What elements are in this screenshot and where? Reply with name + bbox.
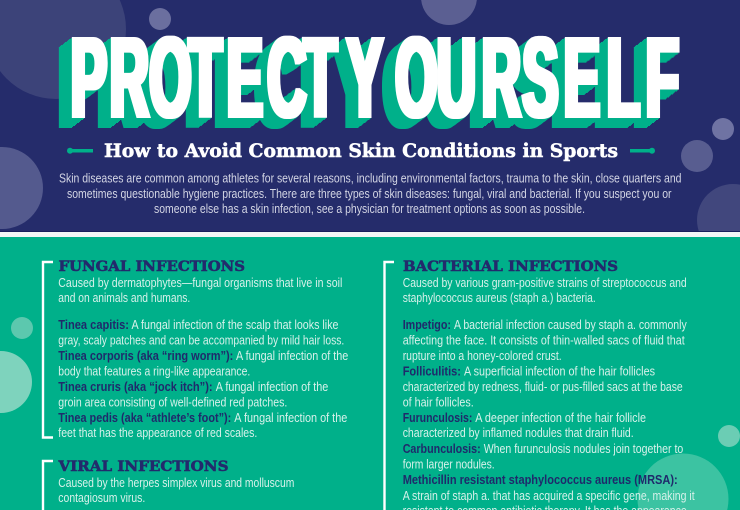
decorative circle: right small xyxy=(718,425,740,447)
entry: tinea corporis: Tinea corporis (aka “ring worm”): xyxy=(58,349,233,363)
entry: impetigo: rupture into a honey-colored crust. xyxy=(403,349,562,363)
entry: tinea corporis xyxy=(58,349,348,378)
entry: MRSA: Methicillin resistant staphylococcus aureus (MRSA): xyxy=(403,473,678,487)
entry: tinea capitis: Tinea capitis: xyxy=(58,318,129,332)
intro text xyxy=(403,276,687,305)
panel: bacterial infections xyxy=(384,259,695,510)
entry: furunculosis: A deeper infection of the hair follicle xyxy=(475,411,646,425)
decorative circle: right medium xyxy=(681,140,713,172)
heading: VIRAL INFECTIONS xyxy=(57,459,228,475)
entry: MRSA: A strain of staph a. that has acquired a specific gene, making it xyxy=(403,489,695,503)
entry: impetigo: A bacterial infection caused by staph a. commonly xyxy=(454,318,687,332)
decorative circle: bottom right xyxy=(697,184,740,256)
entry: tinea cruris: groin area consisting of well-defined red patches. xyxy=(58,396,287,410)
panel: green content background xyxy=(0,231,740,510)
entry: tinea pedis: Tinea pedis (aka “athlete’s foot”): xyxy=(58,411,231,425)
entry: furunculosis: characterized by inflamed nodules that drain fluid. xyxy=(403,426,634,440)
entry: folliculitis xyxy=(403,364,683,410)
intro text xyxy=(58,476,294,505)
entry: furunculosis xyxy=(403,411,646,440)
subtitle: How to Avoid Common Skin Conditions in Sports xyxy=(104,140,618,162)
entry: tinea pedis: feet that has the appearance of red scales. xyxy=(58,426,257,440)
entry: impetigo xyxy=(403,318,687,363)
decorative circle: right large xyxy=(638,454,728,510)
intro text: Caused by dermatophytes—fungal organisms that live in soil xyxy=(58,276,342,290)
entry: tinea cruris xyxy=(58,380,328,410)
intro text: Caused by various gram-positive strains of streptococcus and xyxy=(403,276,687,290)
entry: tinea capitis: A fungal infection of the scalp that looks like xyxy=(132,318,339,332)
text block: introduction: someone else has a skin infection, see a physician for treatment options as soon as possible. xyxy=(154,202,585,216)
entry: furunculosis: Furunculosis: xyxy=(403,411,472,425)
intro text: Caused by the herpes simplex virus and molluscum xyxy=(58,476,294,490)
entry: folliculitis: characterized by redness, fluid- or pus-filled sacs at the base xyxy=(403,380,683,394)
panel: fungal infections xyxy=(43,259,348,440)
entry: folliculitis: of hair follicles. xyxy=(403,396,474,410)
bracket xyxy=(384,262,394,510)
decorative circle: left small xyxy=(11,317,33,339)
entry: folliculitis: A superficial infection of the hair follicles xyxy=(464,364,655,378)
entry: tinea corporis: body that features a ring-like appearance. xyxy=(58,364,250,378)
decorative circle: left large xyxy=(0,351,32,413)
entry: folliculitis: Folliculitis: xyxy=(403,364,461,378)
entry: impetigo: Impetigo: xyxy=(403,318,451,332)
intro text: staphylococcus aureus (staph a.) bacteria. xyxy=(403,291,596,305)
decorative circle: top left small xyxy=(149,8,171,30)
intro text: contagiosum virus. xyxy=(58,491,145,505)
panel: header background xyxy=(0,0,740,256)
icon: right dash with dot xyxy=(630,148,655,154)
entry: tinea capitis xyxy=(58,318,344,348)
entry: tinea pedis xyxy=(58,411,347,440)
entry: tinea capitis: gray, scaly patches and can be accompanied by mild hair loss. xyxy=(58,334,344,348)
icon: left dash with dot xyxy=(67,148,93,154)
intro text: and on animals and humans. xyxy=(58,291,190,305)
decorative circle: left xyxy=(0,147,43,229)
entry: tinea cruris: Tinea cruris (aka “jock itch”): xyxy=(58,380,213,394)
text block: introduction xyxy=(59,172,682,216)
bracket xyxy=(43,461,53,510)
entry: carbunculosis xyxy=(403,442,683,472)
decorative circle: top left large xyxy=(0,0,126,99)
heading: FUNGAL INFECTIONS xyxy=(58,259,245,275)
panel: viral infections xyxy=(43,459,294,510)
entry: tinea cruris: A fungal infection of the xyxy=(216,380,328,394)
entry: carbunculosis: form larger nodules. xyxy=(403,458,495,472)
entry: tinea pedis: A fungal infection of the xyxy=(234,411,347,425)
entry: carbunculosis: When furunculosis nodules join together to xyxy=(484,442,683,456)
decorative circle: right small xyxy=(712,118,734,140)
title: PROTECT YOURSELF xyxy=(71,14,679,141)
decorative circle: top centre xyxy=(421,0,477,25)
entry: MRSA xyxy=(403,473,695,510)
bracket xyxy=(43,262,53,438)
entry: tinea corporis: A fungal infection of the xyxy=(236,349,348,363)
intro text xyxy=(58,276,342,305)
heading: BACTERIAL INFECTIONS xyxy=(403,259,618,275)
entry: carbunculosis: Carbunculosis: xyxy=(403,442,481,456)
entry: impetigo: affecting the face. It consists of thin-walled sacs of fluid that xyxy=(403,334,685,348)
